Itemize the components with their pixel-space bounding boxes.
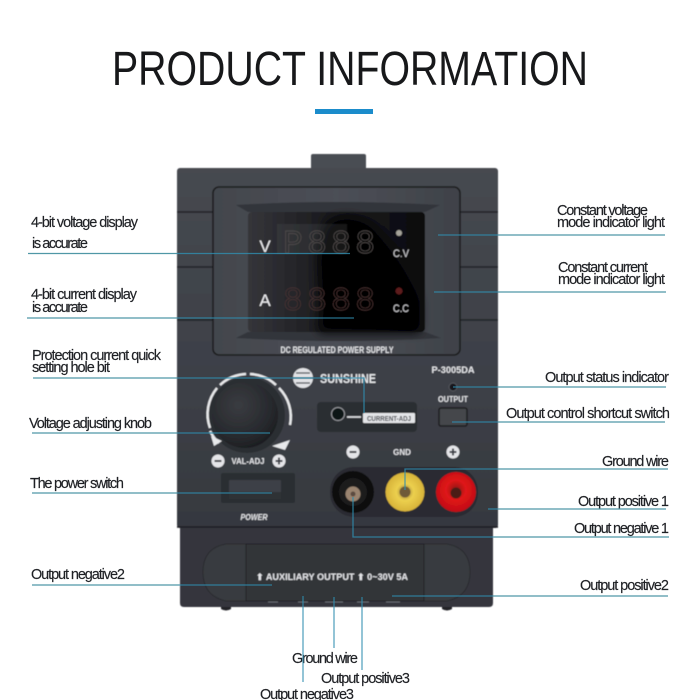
callout: output positive 3: Output positive3 [321, 671, 410, 687]
brand logo [293, 368, 313, 388]
current digits: 8888 [283, 283, 375, 320]
GND label: GND [393, 448, 411, 457]
callout: ground wire [405, 454, 669, 490]
callout: output negative 3 [260, 596, 354, 700]
callout: current display [27, 287, 354, 318]
CV label: C.V [393, 248, 410, 260]
side notches [177, 212, 498, 320]
callout: output positive 3 [321, 597, 410, 687]
callout: power switch: The power switch [30, 476, 124, 492]
auxiliary output label: ⬆ AUXILIARY OUTPUT ⬆ 0~30V 5A [256, 572, 408, 582]
callout: output status indicator: Output status indicator [545, 370, 669, 386]
callout: constant voltage light [438, 203, 665, 235]
callout: voltage knob: Voltage adjusting knob [29, 416, 152, 432]
callout: output control switch: Output control shortcut switch [506, 406, 670, 422]
callout: ground wire: Ground wire [602, 454, 669, 470]
auxiliary port labels [268, 601, 400, 603]
dial plus [272, 454, 286, 468]
right handle [424, 544, 470, 601]
brand name: SUNSHINE [320, 371, 376, 386]
power switch [221, 473, 295, 503]
red terminal [436, 472, 476, 512]
callout: voltage display [28, 215, 350, 254]
current adjust panel: CURRENT-ADJ [367, 416, 411, 423]
device feet [221, 607, 452, 610]
top handle tab [311, 154, 366, 168]
terminal plus symbol [446, 446, 460, 458]
callout: protection current hole [32, 348, 364, 413]
callout: voltage display: 4-bit voltage display [31, 215, 139, 231]
V label: V [259, 237, 271, 256]
POWER label: POWER [240, 513, 268, 522]
callout: protection current hole: setting hole bit [32, 360, 110, 376]
voltage knob [212, 382, 278, 448]
title accent bar [315, 109, 373, 114]
dial minus [212, 454, 224, 468]
callout: voltage display: is accurate [32, 236, 88, 252]
upper body [177, 168, 498, 528]
callout: output negative 1: Output negative 1 [574, 521, 669, 537]
callout: ground wire bottom [292, 597, 358, 667]
callout: constant current light [434, 260, 666, 292]
display bezel [213, 187, 460, 355]
output button [439, 408, 467, 426]
display screen [248, 212, 425, 332]
terminal plate [330, 467, 478, 517]
bezel caption: DC REGULATED POWER SUPPLY [280, 345, 394, 355]
auxiliary output panel [246, 544, 424, 601]
current adjust panel [317, 402, 417, 432]
callout: constant current light: mode indicator light [558, 272, 665, 288]
CC indicator [396, 288, 402, 294]
title: PRODUCT INFORMATION [112, 43, 588, 96]
CV indicator [396, 230, 402, 236]
callout: current display: 4-bit current display [31, 287, 138, 303]
lower body [180, 527, 493, 607]
lower body shadow line [177, 526, 498, 528]
callout: current display: is accurate [32, 300, 88, 316]
callout: output negative 1 [353, 497, 669, 537]
callout: constant voltage light: Constant voltage [557, 203, 648, 219]
VAL-ADJ label: VAL-ADJ [232, 456, 265, 466]
bezel recess [236, 202, 441, 341]
callout: output negative 2: Output negative2 [31, 567, 125, 583]
screen reflection [318, 216, 420, 332]
callout: output positive 1: Output positive 1 [578, 494, 669, 510]
black terminal [332, 471, 374, 513]
callout: constant voltage light: mode indicator light [557, 215, 665, 231]
voltage knob shadow [209, 377, 285, 453]
yellow terminal [386, 472, 424, 512]
callout: ground wire bottom: Ground wire [292, 651, 358, 667]
A label: A [259, 291, 271, 310]
power supply device [177, 154, 498, 610]
callout: constant current light: Constant current [558, 260, 648, 276]
voltage dial ring [208, 374, 291, 450]
OUTPUT label: OUTPUT [438, 395, 468, 404]
output status LED [449, 383, 457, 391]
voltage readout panel [277, 224, 347, 254]
terminal minus symbol [346, 446, 360, 458]
left handle [203, 544, 246, 601]
callout: output positive 2: Output positive2 [580, 578, 669, 594]
voltage digits: P888 [283, 226, 375, 263]
callout: protection current hole: Protection current quick [32, 348, 162, 364]
model number: P-3005DA [432, 365, 475, 375]
CC label: C.C [393, 303, 409, 315]
